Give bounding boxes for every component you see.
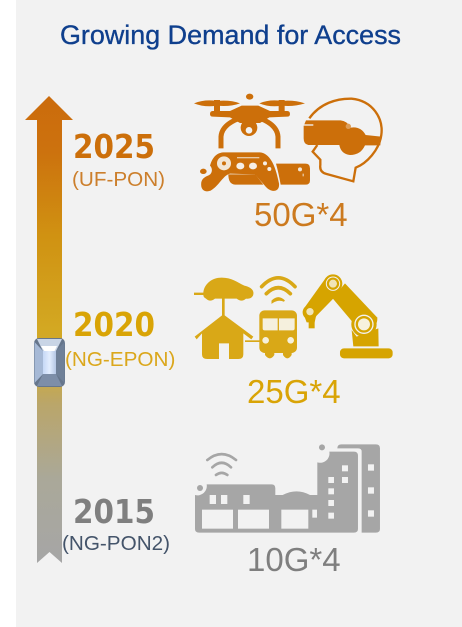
label: 2025: 2025 [73,127,155,166]
title: Growing Demand for Access [60,20,401,50]
icon: wifi bus [245,278,297,358]
icon: apartment tower [337,444,380,533]
icons: 2025 drone, controller, phone, VR headset [194,94,382,191]
icon: wifi signal [207,454,236,475]
label: 2025 [72,127,165,191]
label: 2020 [65,305,175,371]
speed: 10G*4: 10G*4 [247,541,341,578]
icon: drone [194,94,305,148]
label: 2020: (NG-EPON) [65,348,175,371]
icon: smartphone [276,164,310,185]
icon: game controller [200,152,279,191]
icon: office building [195,444,358,533]
speed: 25G*4: 25G*4 [247,373,341,410]
timeline arrow [25,96,73,563]
speed: 50G*4: 50G*4 [254,196,348,233]
label: 2025: (UF-PON) [72,168,165,191]
icons: 2015 wifi, office and apartment buildings [195,444,380,533]
icon: connected car and house [194,278,253,359]
icon: robot arm [303,274,393,358]
label: 2015: 2015 [73,492,155,531]
icon: VR headset [304,99,382,181]
label: 2020: 2020 [73,305,155,344]
icons: 2020 connected car, home, bus, robot arm [194,274,393,359]
slider marker [34,338,65,387]
label: 2015 [62,492,170,555]
label: 2015: (NG-PON2) [62,532,170,555]
